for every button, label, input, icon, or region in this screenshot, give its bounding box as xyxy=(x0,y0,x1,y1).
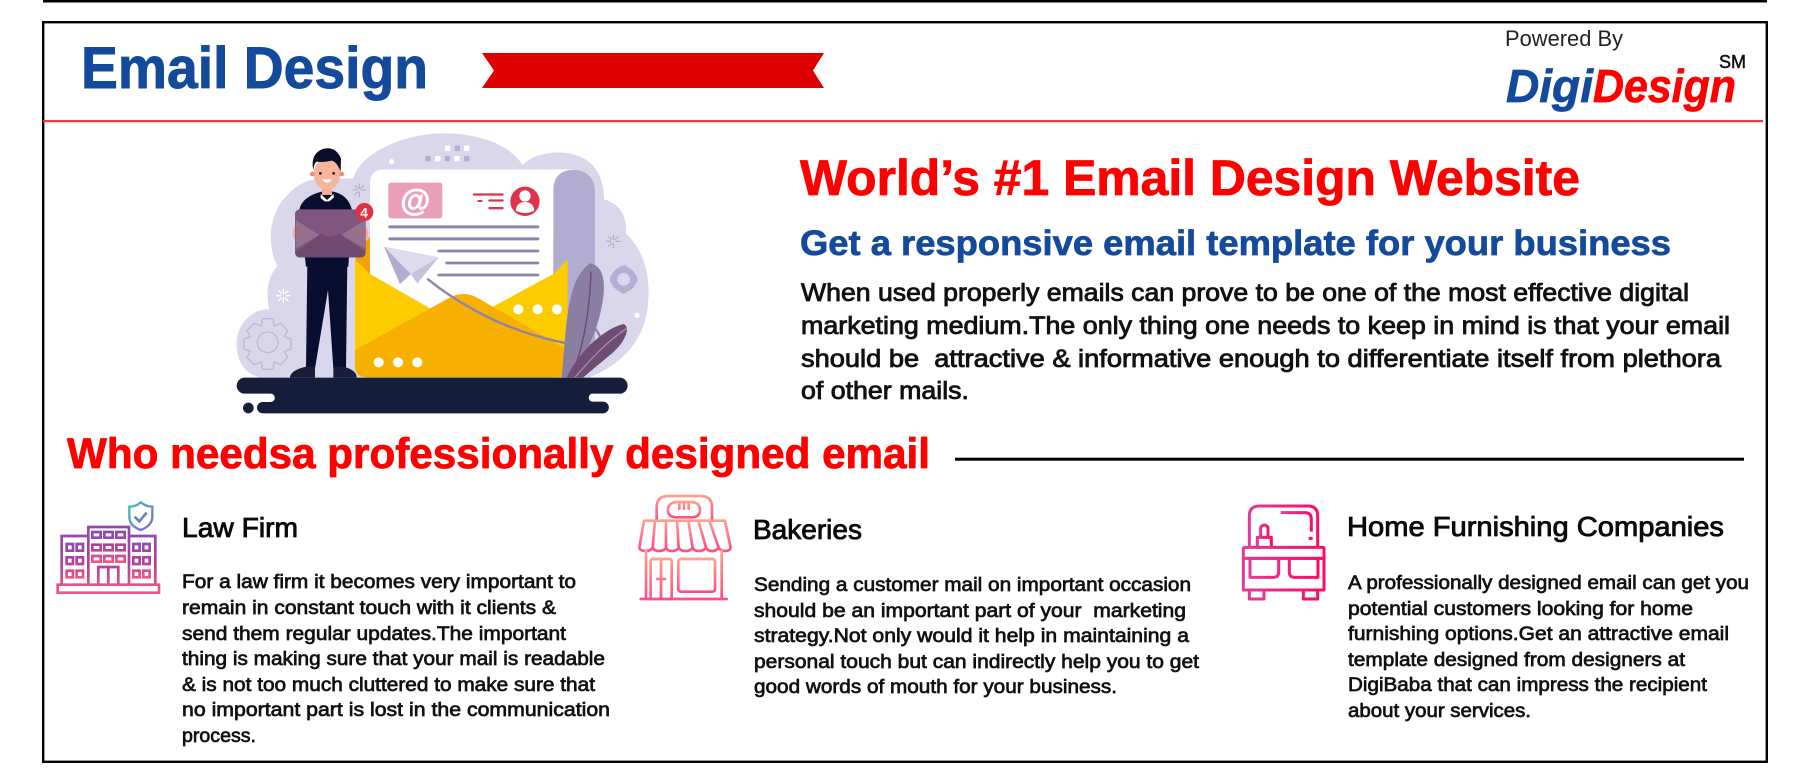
text: bakeries description: should be an important part of your marketing xyxy=(754,600,1186,622)
text: bakeries description: personal touch but can indirectly help you to get xyxy=(754,651,1200,673)
red ribbon xyxy=(482,53,824,88)
flight path xyxy=(428,279,600,345)
title: Email Design xyxy=(81,36,428,101)
text: home furnishing description: furnishing options.Get an attractive email xyxy=(1348,623,1729,645)
subheading: Get a responsive email template for your business xyxy=(800,224,1671,263)
ground xyxy=(237,378,628,413)
headline: World’s #1 Email Design Website xyxy=(800,150,1580,206)
intro paragraph: marketing medium.The only thing one needs to keep in mind is that your email xyxy=(801,312,1730,340)
notification badge xyxy=(355,203,373,221)
logo wordmark: Digi xyxy=(1506,60,1594,112)
logo wordmark red part: Design xyxy=(1593,60,1736,112)
envelope side panels xyxy=(355,259,568,353)
icon: dressing table xyxy=(1243,506,1324,599)
text: bakeries description xyxy=(754,574,1200,698)
lavender cloud background xyxy=(237,133,649,377)
at-sign tile: @ xyxy=(400,184,430,218)
text: home furnishing description: template designed from designers at xyxy=(1348,649,1686,671)
service mark: SM xyxy=(1719,52,1746,72)
letter text lines xyxy=(388,225,539,276)
text: home furnishing description: potential customers looking for home xyxy=(1348,598,1693,620)
intro paragraph: When used properly emails can prove to be one of the most effective digital xyxy=(801,279,1689,307)
at-sign tile xyxy=(388,183,442,218)
intro paragraph: should be attractive & informative enough to differentiate itself from plethora xyxy=(801,345,1721,373)
paper plane xyxy=(384,247,439,284)
panel: home furnishing companies xyxy=(1243,506,1749,722)
gear right xyxy=(610,265,637,293)
text: law firm description: process. xyxy=(182,725,256,747)
envelope dots xyxy=(374,304,562,367)
purple envelope held by man xyxy=(295,209,366,257)
text: home furnishing description: A professionally designed email can get you xyxy=(1348,572,1749,594)
text: home furnishing description xyxy=(1348,572,1749,722)
text: law firm description: no important part is lost in the communication xyxy=(182,699,610,721)
icon: bakery storefront xyxy=(639,496,731,599)
envelope back xyxy=(355,237,568,277)
sparkles xyxy=(277,184,620,302)
gear left xyxy=(244,319,291,369)
powered by label: Powered By xyxy=(1505,26,1623,51)
text: bakeries description: good words of mouth for your business. xyxy=(754,676,1117,698)
heading: home furnishing companies: Home Furnishing Companies xyxy=(1347,511,1724,542)
text: law firm description xyxy=(182,571,610,747)
scroll side of letter xyxy=(553,170,595,353)
envelope front flap xyxy=(355,294,568,377)
panel: law firm xyxy=(58,502,610,747)
text: home furnishing description: about your services. xyxy=(1348,700,1531,722)
text: home furnishing description: DigiBaba that can impress the recipient xyxy=(1348,674,1708,696)
intro paragraph xyxy=(801,279,1730,405)
panel: bakeries xyxy=(639,496,1200,698)
white letter xyxy=(370,169,575,333)
heading: bakeries: Bakeries xyxy=(753,514,862,545)
cloud dots xyxy=(389,146,640,318)
text: law firm description: thing is making sure that your mail is readable xyxy=(182,648,605,670)
notification badge: 4 xyxy=(360,204,368,220)
text: bakeries description: strategy.Not only would it help in maintaining a xyxy=(754,625,1189,647)
icon: office building with shield xyxy=(58,502,159,593)
text: law firm description: & is not too much cluttered to make sure that xyxy=(182,674,596,696)
text: law firm description: remain in constant touch with it clients & xyxy=(182,597,556,619)
heading: law firm: Law Firm xyxy=(182,512,298,543)
feathers xyxy=(562,263,627,377)
logo: DigiDesign xyxy=(1505,26,1746,112)
illustration: man with email envelope xyxy=(237,133,649,413)
section heading: Who needsa professionally designed email xyxy=(67,430,930,478)
text: law firm description: For a law firm it becomes very important to xyxy=(182,571,576,593)
intro paragraph: of other mails. xyxy=(801,377,969,405)
man xyxy=(290,148,368,378)
text: law firm description: send them regular updates.The important xyxy=(182,623,567,645)
text: bakeries description: Sending a customer mail on important occasion xyxy=(754,574,1191,596)
sender lines and avatar xyxy=(473,187,540,216)
